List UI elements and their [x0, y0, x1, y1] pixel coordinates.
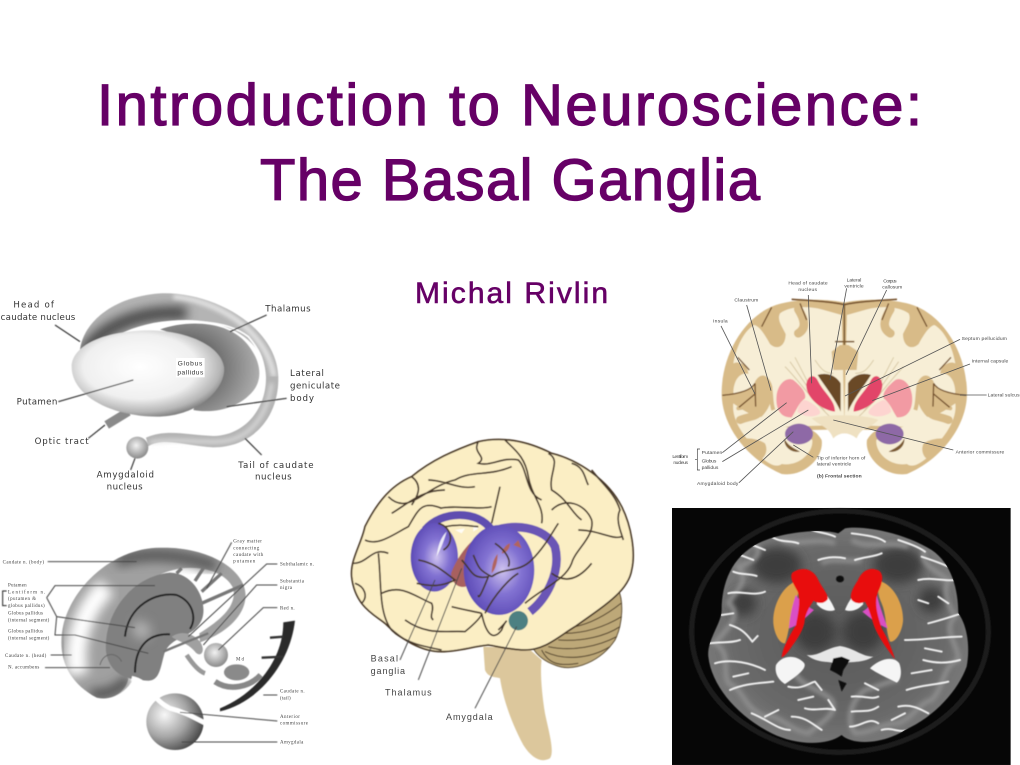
labels: Lateral: [290, 369, 324, 379]
putamen left (orange): [773, 582, 798, 643]
labels: Globus pallidus: [8, 630, 43, 635]
labels: geniculate: [290, 382, 340, 392]
author name: Michal Rivlin: [415, 277, 608, 310]
labels: Amygdaloid: [97, 471, 154, 481]
labels: Lentiform n.: [8, 590, 45, 595]
labels: Putamen: [8, 584, 27, 589]
labels: connecting: [233, 546, 260, 551]
labels: nigra: [280, 586, 293, 591]
labels: [1, 300, 340, 492]
diagram: coloured frontal section, upper right: [672, 278, 1020, 487]
cerebrum: [352, 439, 633, 652]
caudate light and dark shading: [76, 555, 217, 694]
basal ganglia right ball: [464, 525, 534, 615]
labels: (putamen &: [8, 597, 36, 602]
connecting striations: [177, 568, 243, 603]
amygdaloid body: [785, 424, 813, 444]
caudate right (red): [851, 569, 895, 659]
leader lines: [55, 315, 287, 470]
optic tract: [107, 412, 128, 425]
brain tissue: [708, 528, 968, 743]
caudate left (red): [782, 569, 828, 658]
cerebellum: [533, 590, 622, 667]
thalamus shape: [160, 323, 259, 411]
title: [97, 73, 922, 213]
labels: Corpus: [883, 279, 897, 285]
labels: Putamen: [17, 397, 57, 407]
internal capsule fibres: [785, 357, 833, 417]
labels: Head of: [13, 300, 55, 310]
labels: Lentiform: [672, 454, 688, 460]
red nucleus ball: [204, 643, 228, 667]
labels: caudate nucleus: [1, 313, 76, 323]
diagram: basal ganglia line drawing, upper left: [1, 293, 340, 492]
labels: Insula: [713, 318, 728, 324]
labels: Septum pellucidum: [962, 336, 1007, 342]
labels: Substantia: [280, 579, 305, 584]
white matter with gyral tongues: [733, 307, 844, 466]
labels: nucleus: [798, 287, 817, 293]
labels: Thalamus: [264, 305, 311, 315]
diagram: coloured brain side view, lower centre: [352, 439, 633, 760]
MRI scan with coloured basal ganglia, lower right: [672, 508, 1011, 765]
subthalamic and substantia nigra: [172, 633, 203, 654]
labels: Tip of inferior horn of: [817, 455, 866, 461]
basal ganglia arcs: [425, 515, 492, 530]
central white CSF: [776, 657, 805, 684]
labels: Putamen: [702, 450, 723, 456]
labels: Amygdaloid body: [697, 481, 739, 487]
labels: Claustrum: [734, 297, 758, 303]
brainstem: [483, 647, 552, 760]
labels: Amygdala: [280, 741, 304, 746]
anterior commissure: [132, 678, 213, 727]
basal ganglia left ball: [411, 523, 458, 592]
labels: caudate with: [233, 553, 264, 558]
labels: [371, 654, 493, 722]
lateral ventricle: [818, 374, 841, 412]
labels: Lateral: [847, 278, 861, 284]
labels: Anterior: [280, 715, 300, 720]
leader lines: [721, 288, 987, 483]
labels: pallidus: [177, 370, 204, 377]
labels: Internal capsule: [972, 358, 1009, 364]
diagram: greyscale basal ganglia, lower left: [3, 539, 314, 750]
labels: (internal segment): [8, 618, 50, 623]
caudate arc: [61, 548, 246, 698]
labels: body: [290, 394, 314, 404]
sulci: [353, 440, 623, 650]
labels: ventricle: [844, 283, 864, 289]
globus pallidus left (magenta): [789, 595, 814, 628]
caudate tail: [220, 621, 295, 711]
caudate nucleus band: [80, 293, 278, 447]
labels: nucleus: [107, 482, 143, 492]
title: The Basal Ganglia: [260, 148, 761, 213]
labels: Globus: [702, 459, 717, 465]
labels: Lateral sulcus: [988, 393, 1020, 399]
labels: N. accumbens: [8, 665, 39, 670]
labels: Optic tract: [35, 437, 89, 447]
internal black outlines: [125, 594, 193, 673]
labels: ganglia: [371, 666, 405, 676]
globus pallidus: [797, 400, 820, 416]
labels: Basal: [371, 654, 398, 664]
title: Introduction to Neuroscience:: [97, 73, 922, 138]
amygdaloid nucleus ball: [126, 437, 148, 459]
claustrum strip: [770, 388, 773, 410]
labels: Caudate n. (head): [5, 654, 47, 659]
labels: Thalamus: [385, 687, 432, 697]
labels: pallidus: [702, 465, 719, 471]
thalamus: [451, 530, 492, 587]
leader lines: [400, 568, 517, 708]
globus pallidus label box: [176, 358, 205, 377]
labels: Red n.: [280, 606, 295, 611]
putamen: [776, 379, 805, 417]
amygdala: [509, 611, 528, 630]
left hemisphere: [722, 299, 845, 474]
labels: lateral ventricle: [817, 461, 852, 467]
labels: commissure: [280, 722, 309, 727]
putamen body: [72, 330, 224, 417]
central septum and callosum: [835, 303, 854, 370]
caudate shading: [83, 297, 274, 377]
labels: callosum: [882, 285, 902, 291]
grey cortical folds: [715, 540, 958, 733]
labels: Globus pallidus: [8, 611, 43, 616]
labels: Tail of caudate: [237, 461, 314, 471]
MRI interior: [710, 530, 962, 733]
putamen and globus pallidus mass: [106, 573, 203, 681]
inferior horn: [784, 438, 800, 452]
labels: putamen: [233, 560, 256, 565]
skull ring: [692, 511, 988, 752]
labels: Head of caudate: [788, 281, 828, 287]
head of caudate: [806, 376, 835, 412]
labels: (tail): [280, 696, 291, 701]
labels: nucleus: [255, 472, 292, 482]
labels: Caudate n. (body): [3, 561, 44, 566]
labels: Amygdala: [446, 712, 493, 722]
black background: [672, 508, 1011, 765]
labels: (internal segment): [8, 637, 50, 642]
labels: Subthalamic n.: [280, 563, 314, 568]
labels: globus pallidus): [8, 604, 45, 609]
white sulci: [710, 530, 962, 731]
labels: Caudate n.: [280, 689, 305, 694]
midbrain crescents: [224, 664, 249, 680]
labels: [672, 278, 1020, 487]
dark white-matter patches: [730, 547, 945, 652]
white gaps and red bridges: [437, 525, 478, 557]
putamen right (orange): [878, 582, 903, 642]
labels: nucleus: [673, 460, 688, 466]
amygdala ball: [146, 693, 204, 750]
globus pallidus right (magenta): [862, 593, 888, 628]
labels: Gray matter: [233, 539, 262, 544]
leader lines: [3, 542, 277, 742]
labels: (b) Frontal section: [817, 474, 862, 480]
labels: Md: [236, 658, 244, 663]
labels: Globus: [178, 360, 203, 367]
labels: [3, 539, 314, 746]
labels: Anterior commissure: [956, 449, 1005, 455]
